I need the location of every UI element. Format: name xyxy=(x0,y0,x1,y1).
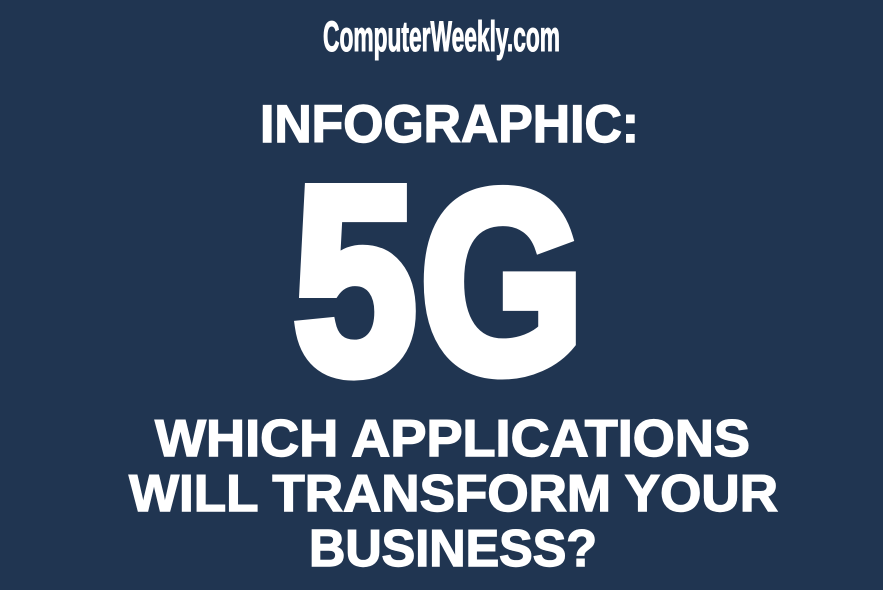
heading: INFOGRAPHIC: INFOGRAPHIC: xyxy=(260,95,639,154)
subtitle: which applications will transform your business xyxy=(129,410,778,578)
large title: 5G xyxy=(293,132,584,429)
letter G: G xyxy=(420,137,584,426)
subtitle line 3: BUSINESS? xyxy=(309,520,597,578)
subtitle line 1: WHICH APPLICATIONS xyxy=(155,410,750,468)
logo: ComputerWeekly.com: ComputerWeekly.com xyxy=(323,13,560,61)
subtitle line 2: WILL TRANSFORM YOUR xyxy=(129,465,778,523)
digit 5: 5 xyxy=(293,132,417,429)
